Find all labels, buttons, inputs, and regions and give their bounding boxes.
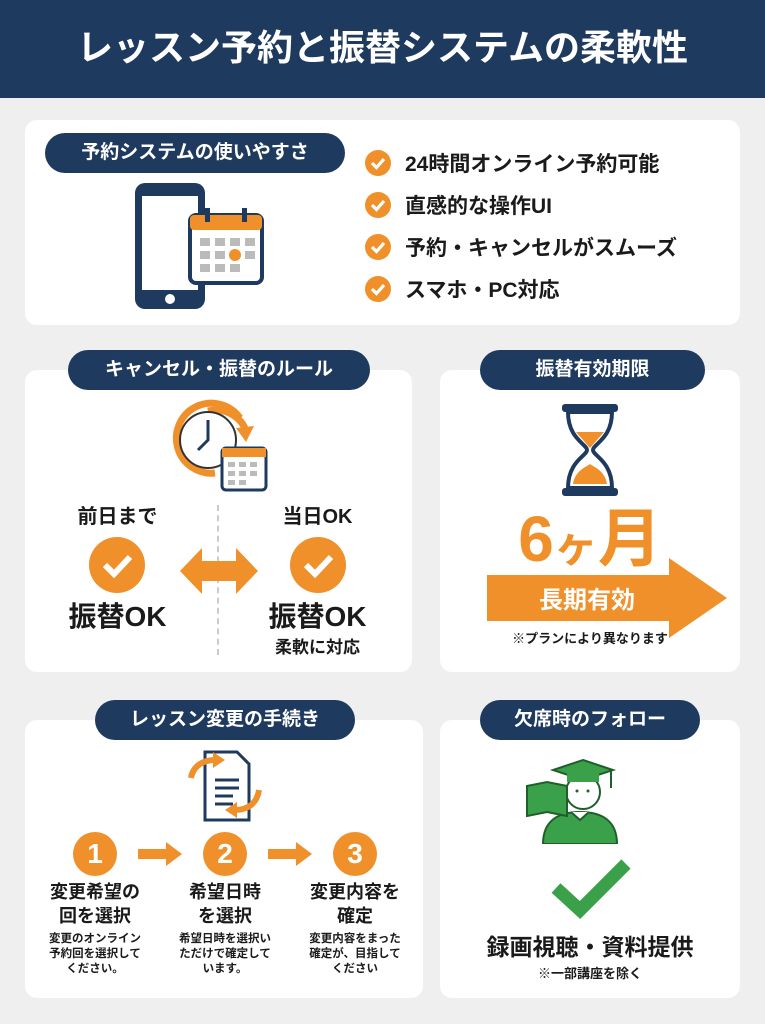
heading pill: cancel <box>68 350 370 390</box>
step 2: います。 <box>203 963 247 975</box>
panel: validity <box>440 370 740 672</box>
note: ※プランにより異なります <box>512 631 668 646</box>
step 1 <box>49 832 141 975</box>
step 3 <box>309 832 401 975</box>
right: 当日OK: 柔軟に対応 <box>275 638 360 657</box>
left: 前日まで <box>68 506 166 632</box>
step 1: 変更希望の <box>50 882 140 902</box>
icon: document swap <box>188 750 262 822</box>
step 3: 確定 <box>337 906 373 926</box>
step 3: 変更内容をまった <box>309 933 401 945</box>
step 2: 2 <box>217 838 233 869</box>
checklist: 24時間オンライン予約可能 <box>405 153 659 176</box>
step 2 <box>179 832 271 975</box>
step 3: 確定が、目指して <box>309 948 401 960</box>
left: 前日まで: 前日まで <box>78 506 158 528</box>
arrow 2 <box>268 842 312 866</box>
checklist: スマホ・PC対応 <box>405 279 560 302</box>
step 1: 変更のオンライン <box>49 933 141 945</box>
icon: student <box>526 759 618 844</box>
panel: change procedure <box>25 720 423 998</box>
arrow 1 <box>138 842 182 866</box>
step 1: 予約回を選択して <box>49 948 141 960</box>
heading pill: validity <box>480 350 705 390</box>
panel: cancel rules <box>25 370 412 672</box>
panel: absence follow <box>440 720 740 998</box>
step 2: 希望日時を選択い <box>179 933 271 945</box>
text: 録画視聴・資料提供 <box>486 934 694 960</box>
heading pill: change: レッスン変更の手続き <box>130 709 320 730</box>
panel: reservation system <box>25 120 740 325</box>
checklist <box>365 150 677 302</box>
step 3: 3 <box>347 838 363 869</box>
step 3: ください <box>332 963 378 975</box>
left: 前日まで: 振替OK <box>68 601 166 632</box>
heading pill: change <box>95 700 355 740</box>
header <box>0 0 765 98</box>
icon: hourglass <box>562 404 618 496</box>
step 3: 変更内容を <box>310 882 400 902</box>
right: 当日OK <box>268 506 366 657</box>
arrow banner <box>487 558 727 638</box>
step 1: 1 <box>87 838 103 869</box>
right: 当日OK: 振替OK <box>268 601 366 632</box>
step 1: ください。 <box>66 963 124 975</box>
icon: green check <box>552 859 630 919</box>
checklist: 直感的な操作UI <box>405 195 552 218</box>
big number: 6ヶ月 <box>518 503 662 575</box>
step 2: を選択 <box>198 906 252 926</box>
title: レッスン予約と振替システムの柔軟性 <box>77 27 688 68</box>
heading pill: 予約システムの使いやすさ <box>81 142 309 163</box>
icon: clock calendar <box>172 400 268 492</box>
icon: phone with calendar <box>135 183 264 309</box>
heading pill: validity: 振替有効期限 <box>535 359 650 380</box>
heading pill: follow <box>480 700 700 740</box>
step 2: ただけで確定して <box>179 948 271 960</box>
step 2: 希望日時 <box>189 882 261 902</box>
checklist: 予約・キャンセルがスムーズ <box>405 237 677 260</box>
heading pill: cancel: キャンセル・振替のルール <box>105 359 333 380</box>
note: ※一部講座を除く <box>538 966 642 981</box>
step 1: 回を選択 <box>59 906 131 926</box>
heading pill <box>45 133 345 173</box>
right: 当日OK: 当日OK <box>282 506 352 528</box>
heading pill: follow: 欠席時のフォロー <box>514 709 666 730</box>
panel: validity: 長期有効 <box>539 587 635 614</box>
arrow: double <box>180 548 258 594</box>
